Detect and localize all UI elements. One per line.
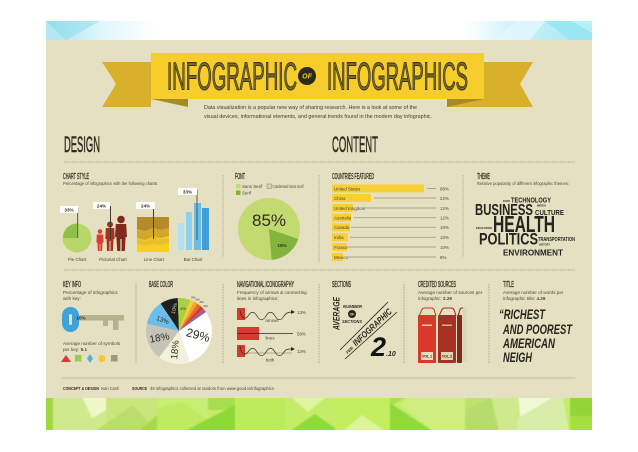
bars: 10% bbox=[440, 235, 449, 240]
typographic graphic: NUMBER bbox=[343, 304, 363, 309]
word cloud: TECHNOLOGY bbox=[511, 198, 551, 204]
typographic graphic: 2 bbox=[370, 332, 386, 362]
legend: Serif bbox=[242, 190, 252, 196]
both row: 13% bbox=[297, 349, 306, 354]
left ribbon fold bbox=[151, 99, 188, 107]
right ribbon tail bbox=[447, 62, 533, 107]
pie chart bbox=[60, 206, 92, 262]
left ribbon tail bbox=[102, 62, 151, 107]
bars: 8% bbox=[440, 255, 446, 260]
color pie chart: 2% bbox=[200, 300, 204, 304]
lines row bbox=[237, 327, 306, 340]
top cyan triangle band bbox=[46, 21, 592, 40]
description bbox=[237, 290, 307, 301]
bars: Mexico bbox=[334, 255, 348, 260]
icon: books bbox=[418, 308, 467, 363]
quoted title: NEIGH bbox=[503, 349, 533, 365]
color pie chart: 18% bbox=[149, 331, 170, 346]
arrows row: 13% bbox=[297, 310, 306, 315]
panel: base color: BASE COLOR bbox=[149, 280, 173, 289]
word cloud bbox=[475, 198, 575, 258]
line chart: Line Chart bbox=[144, 257, 165, 262]
panel: sections bbox=[332, 280, 397, 362]
word cloud: HEALTH bbox=[493, 211, 555, 237]
yellow band bbox=[151, 53, 484, 99]
bars: India bbox=[334, 235, 344, 240]
panel: theme bbox=[475, 172, 575, 258]
description bbox=[63, 290, 118, 301]
pictorial chart: Pictorial Chart bbox=[99, 257, 128, 262]
quoted title: AND POOREST bbox=[502, 321, 573, 337]
credits: Ivan Cash bbox=[101, 386, 119, 391]
description: Frequency of arrows & connecting bbox=[237, 290, 307, 295]
font pie chart: 15% bbox=[277, 243, 287, 248]
panel: sections: SECTIONS bbox=[332, 280, 351, 289]
bars: Australia bbox=[334, 216, 352, 220]
panel: base color bbox=[146, 280, 212, 364]
panel: theme: THEME bbox=[477, 172, 490, 181]
color pie chart: 2% bbox=[191, 296, 196, 300]
word cloud: BUSINESS bbox=[475, 202, 533, 219]
description: lines in infographics: bbox=[237, 296, 279, 301]
typographic graphic: .10 bbox=[386, 351, 396, 358]
pictorial chart: 24% bbox=[97, 204, 106, 208]
panel: countries featured bbox=[332, 172, 449, 261]
description: infographic title: 4.26 bbox=[503, 296, 546, 301]
word cloud: TRANSPORTATION bbox=[538, 237, 575, 243]
color pie chart: 13% bbox=[155, 315, 170, 326]
color pie chart: 10% bbox=[171, 303, 179, 315]
word cloud: POLITICS bbox=[479, 230, 538, 248]
heading: TITLE bbox=[503, 280, 514, 289]
word cloud: ENVIRONMENT bbox=[503, 248, 564, 258]
bars: Canada bbox=[334, 225, 350, 230]
credits: SOURCE bbox=[132, 386, 147, 391]
panel: credited sources: CREDITED SOURCES bbox=[418, 280, 456, 289]
panel: navigational iconography bbox=[237, 280, 307, 362]
icon: key: 10% bbox=[76, 316, 86, 320]
text: DESIGN bbox=[64, 132, 100, 157]
typographic graphic: PER bbox=[345, 345, 354, 355]
pie chart: Pie Chart bbox=[68, 257, 87, 262]
panel: font bbox=[235, 172, 304, 260]
font pie chart bbox=[238, 198, 300, 260]
right ribbon fold bbox=[447, 99, 484, 107]
description: with key: bbox=[63, 296, 81, 301]
panel: key info: KEY INFO bbox=[63, 280, 81, 289]
color pie chart bbox=[146, 296, 212, 364]
credits bbox=[63, 386, 275, 391]
credits: CONCEPT & DESIGN bbox=[63, 386, 100, 391]
description: Average number of words per bbox=[503, 290, 564, 295]
description: Percentage of infographics with the following charts: bbox=[63, 181, 158, 186]
font pie chart: 85% bbox=[252, 211, 286, 230]
typographic graphic: OF bbox=[350, 312, 355, 316]
quoted title bbox=[499, 306, 573, 365]
icon: books: VOL.2 bbox=[442, 354, 452, 358]
both row: both bbox=[266, 358, 275, 362]
bar chart: Bar Chart bbox=[184, 257, 203, 262]
icons: symbols bbox=[61, 354, 118, 363]
bars: 12% bbox=[440, 206, 449, 211]
color pie chart: 2% bbox=[196, 298, 200, 302]
quoted title: AMERICAN bbox=[502, 335, 556, 351]
panel: title bbox=[499, 280, 573, 365]
title of badge: OF bbox=[302, 74, 313, 80]
bottom green triangle band bbox=[46, 398, 592, 430]
background panel bbox=[46, 40, 592, 398]
bar chart: 33% bbox=[183, 190, 192, 194]
word cloud: CULTURE bbox=[535, 208, 564, 217]
legend bbox=[236, 184, 304, 196]
legend: Sans Serif bbox=[242, 184, 263, 189]
description: infographic: 2.29 bbox=[418, 296, 452, 301]
text: CONTENT bbox=[332, 132, 378, 157]
typographic graphic: SECTIONS bbox=[342, 319, 362, 324]
icon: books: VOL.1 bbox=[422, 354, 432, 358]
line chart bbox=[136, 202, 169, 262]
description: symbols bbox=[63, 341, 121, 352]
bar chart bbox=[178, 188, 209, 262]
description: symbols: per key: 5.1 bbox=[63, 347, 87, 352]
both row bbox=[237, 345, 306, 362]
title banner bbox=[102, 53, 533, 107]
description bbox=[418, 290, 483, 301]
lines row: 58% bbox=[297, 332, 306, 336]
bars: United Kingdom bbox=[334, 206, 366, 211]
word cloud: MEDIA bbox=[537, 204, 547, 208]
intro text: Data visualization is a popular new way of sharing research. Here is a look at some of the bbox=[204, 105, 417, 111]
panel: navigational iconography: NAVIGATIONAL ICONOGRAPHY bbox=[237, 280, 294, 289]
panel: credited sources bbox=[418, 280, 483, 363]
intro text: visual devices, informational elements, and general trends found in the modern day infographic. bbox=[204, 114, 432, 120]
panel: key info bbox=[61, 280, 124, 363]
arrows row bbox=[237, 308, 306, 323]
pie chart: 33% bbox=[64, 208, 74, 212]
word cloud: EDUCATION bbox=[476, 226, 492, 230]
lines row: lines bbox=[265, 336, 275, 340]
pictorial chart bbox=[93, 202, 128, 262]
color pie chart: 2% bbox=[204, 304, 208, 308]
arrows row: arrows bbox=[265, 318, 279, 323]
typographic graphic: INFOGRAPHIC bbox=[351, 306, 394, 348]
title banner: INFOGRAPHICS bbox=[327, 56, 468, 98]
bars: 88% bbox=[440, 186, 449, 191]
panel: countries featured: COUNTRIES FEATURED bbox=[332, 172, 374, 181]
quoted title: “RICHEST bbox=[499, 306, 546, 322]
credits: 49 infographics collected at random from www.good.is/infographics bbox=[150, 386, 275, 391]
intro text bbox=[204, 105, 432, 120]
color pie chart: 18% bbox=[169, 339, 182, 360]
bars bbox=[332, 184, 449, 261]
title of badge bbox=[298, 67, 316, 85]
word cloud: FOOD bbox=[503, 199, 511, 203]
panel: chart style bbox=[60, 172, 209, 262]
bars: China bbox=[334, 196, 346, 201]
typographic graphic bbox=[332, 296, 397, 362]
bars: 10% bbox=[440, 225, 449, 230]
bars: France bbox=[334, 245, 348, 250]
description: Relative popularity of different infographic themes: bbox=[477, 181, 569, 186]
panel: font: FONT bbox=[235, 172, 245, 181]
title banner: INFOGRAPHIC bbox=[167, 56, 297, 98]
description: Percentage of infographics bbox=[63, 290, 118, 295]
word cloud: HISTORY bbox=[539, 242, 550, 246]
typographic graphic: AVERAGE bbox=[332, 296, 342, 331]
line chart: 24% bbox=[141, 204, 150, 208]
description bbox=[503, 290, 564, 301]
description: symbols: Average number of symbols bbox=[63, 341, 121, 346]
color pie chart: 4% bbox=[180, 306, 186, 311]
color pie chart: 29% bbox=[185, 325, 212, 345]
bars: 10% bbox=[440, 245, 449, 250]
bars: 22% bbox=[440, 196, 449, 201]
bars: 12% bbox=[440, 216, 449, 220]
legend: Condensed Sans Serif bbox=[272, 184, 304, 189]
description: Average number of sources per bbox=[418, 290, 483, 295]
panel: chart style: CHART STYLE bbox=[63, 172, 89, 181]
bars: United States bbox=[334, 186, 361, 191]
